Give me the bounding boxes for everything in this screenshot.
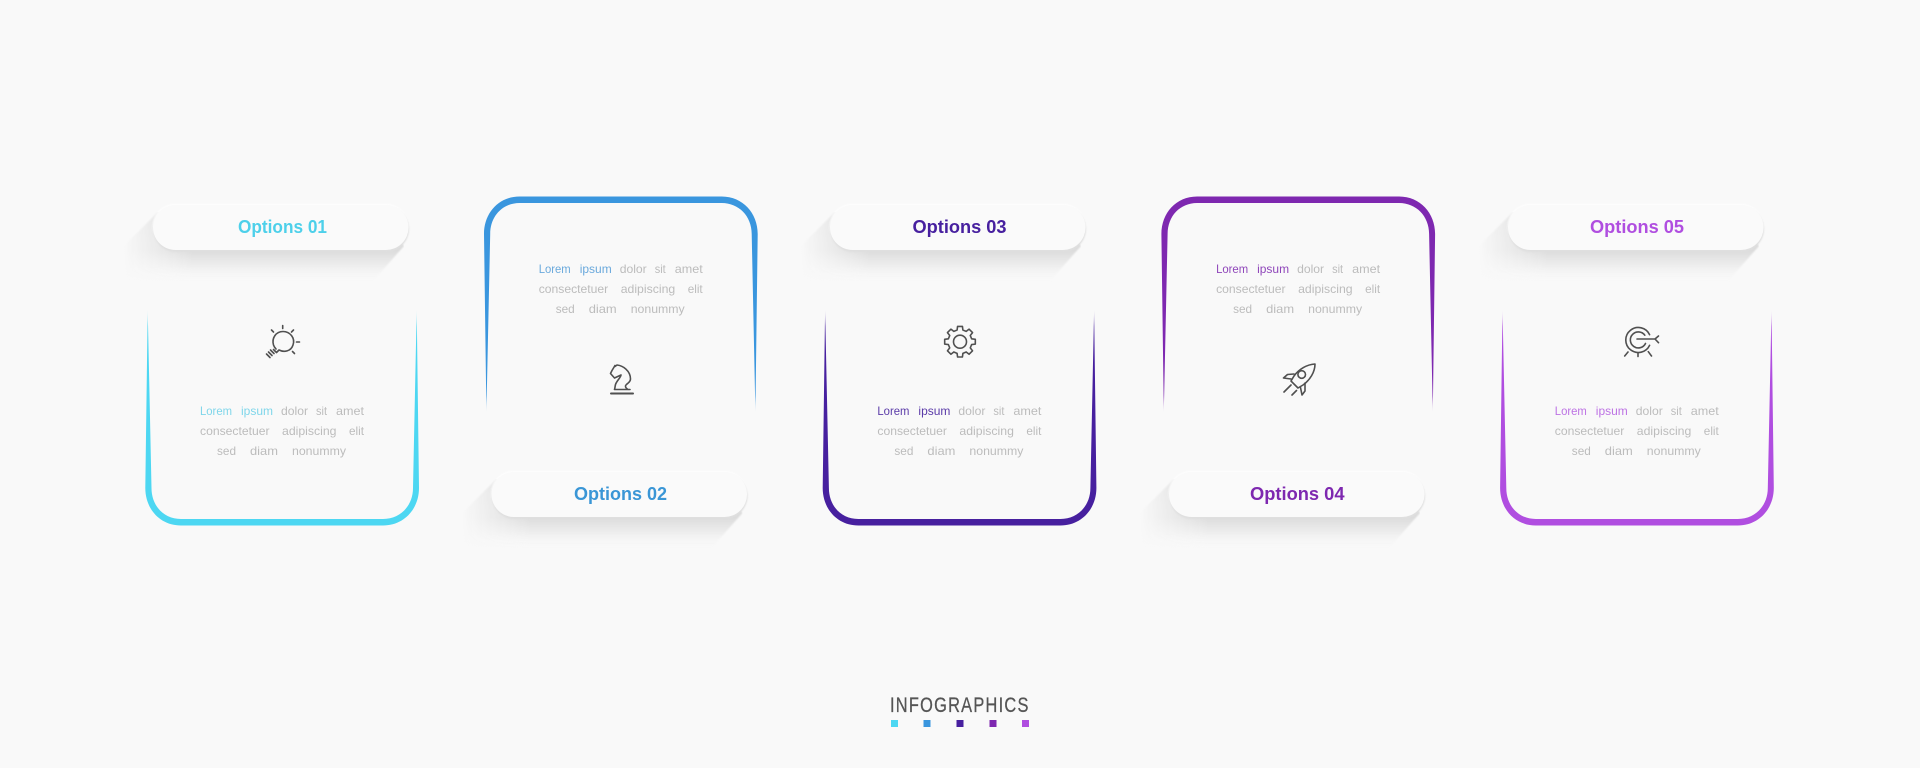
card 1 pill label <box>140 216 410 268</box>
card 2 pill label <box>478 483 748 535</box>
icon: rocket <box>1284 364 1315 395</box>
card 3 description: nonummy <box>969 444 1023 458</box>
card 3 description: sed <box>894 444 913 458</box>
card 3 pill label <box>817 216 1086 268</box>
card 5 description: amet <box>1691 404 1719 418</box>
card 2 description <box>539 262 703 316</box>
panel: card 1 <box>140 216 419 526</box>
card 5 description: sed <box>1572 444 1591 458</box>
card 5 description: ipsum <box>1596 404 1628 418</box>
card 3 description: elit <box>1026 424 1042 438</box>
card 2 description: ipsum <box>580 262 612 276</box>
card 1 description: amet <box>336 404 365 418</box>
card 5 frame <box>1500 310 1774 526</box>
card 4 description: sit <box>1332 262 1344 276</box>
icon: gear <box>945 326 975 357</box>
card 5 description: sit <box>1671 404 1682 418</box>
card 1 description: Lorem <box>200 404 232 418</box>
card 1 description: nonummy <box>292 444 346 458</box>
card 4 description: nonummy <box>1308 302 1362 316</box>
icon: light bulb <box>266 326 300 358</box>
card 5 description: nonummy <box>1647 444 1701 458</box>
card 2 pill label: Options 02 <box>574 484 667 504</box>
card 4 description <box>1216 262 1381 316</box>
panel: card 3 <box>817 216 1096 526</box>
card 5 pill label <box>1495 216 1764 268</box>
card 5 description: adipiscing <box>1637 424 1691 438</box>
card 4 pill label <box>1156 483 1426 535</box>
card 3 description: Lorem <box>877 404 909 418</box>
card 5 description: diam <box>1605 444 1633 458</box>
card 1 description: diam <box>250 444 278 458</box>
card 3 description: adipiscing <box>959 424 1014 438</box>
panel: card 4 <box>1156 196 1436 535</box>
card 3 frame <box>823 310 1096 526</box>
panel: card 2 <box>478 196 758 535</box>
card 1 description: dolor <box>281 404 308 418</box>
card 4 description: ipsum <box>1257 262 1289 276</box>
card 2 description: diam <box>589 302 617 316</box>
card 1 description: adipiscing <box>282 424 336 438</box>
card 4 description: diam <box>1266 302 1294 316</box>
card 2 description: nonummy <box>631 302 685 316</box>
card 5 description: elit <box>1704 424 1719 438</box>
card 3 pill label: Options 03 <box>912 217 1006 237</box>
card 3 description: amet <box>1013 404 1042 418</box>
card 5 description <box>1555 404 1719 458</box>
card 2 frame <box>484 196 758 412</box>
card 5 description: Lorem <box>1555 404 1587 418</box>
legend squares <box>891 720 1029 727</box>
card 4 description: dolor <box>1297 262 1324 276</box>
icon: chess knight <box>610 365 633 394</box>
card 3 description <box>877 404 1042 458</box>
card 3 description: ipsum <box>918 404 950 418</box>
card 3 description: dolor <box>958 404 985 418</box>
card 1 description: consectetuer <box>200 424 270 438</box>
card 4 description: elit <box>1365 282 1381 296</box>
card 2 description: consectetuer <box>539 282 608 296</box>
card 3 description: consectetuer <box>877 424 947 438</box>
card 5 description: dolor <box>1636 404 1663 418</box>
card 4 pill label: Options 04 <box>1250 484 1344 504</box>
card 2 description: elit <box>688 282 703 296</box>
card 2 description: sed <box>556 302 575 316</box>
card 3 description: sit <box>993 404 1005 418</box>
card 2 description: dolor <box>620 262 647 276</box>
icon: target with arrow <box>1625 328 1658 356</box>
card 1 pill label: Options 01 <box>238 217 327 237</box>
card 5 description: consectetuer <box>1555 424 1624 438</box>
card 4 frame <box>1161 196 1435 412</box>
card 1 description <box>200 404 365 458</box>
card 3 description: diam <box>927 444 955 458</box>
card 1 description: ipsum <box>241 404 273 418</box>
card 1 description: sit <box>316 404 328 418</box>
card 2 description: adipiscing <box>621 282 675 296</box>
card 2 description: amet <box>675 262 703 276</box>
footer title: INFOGRAPHICS <box>890 693 1030 716</box>
card 5 pill label: Options 05 <box>1590 217 1684 237</box>
card 1 description: elit <box>349 424 365 438</box>
card 2 description: Lorem <box>539 262 571 276</box>
card 1 frame <box>145 310 419 526</box>
card 1 description: sed <box>217 444 236 458</box>
card 4 description: Lorem <box>1216 262 1248 276</box>
card 4 description: consectetuer <box>1216 282 1286 296</box>
panel: card 5 <box>1495 216 1774 526</box>
card 4 description: adipiscing <box>1298 282 1353 296</box>
card 2 description: sit <box>655 262 666 276</box>
card 4 description: sed <box>1233 302 1252 316</box>
card 4 description: amet <box>1352 262 1381 276</box>
